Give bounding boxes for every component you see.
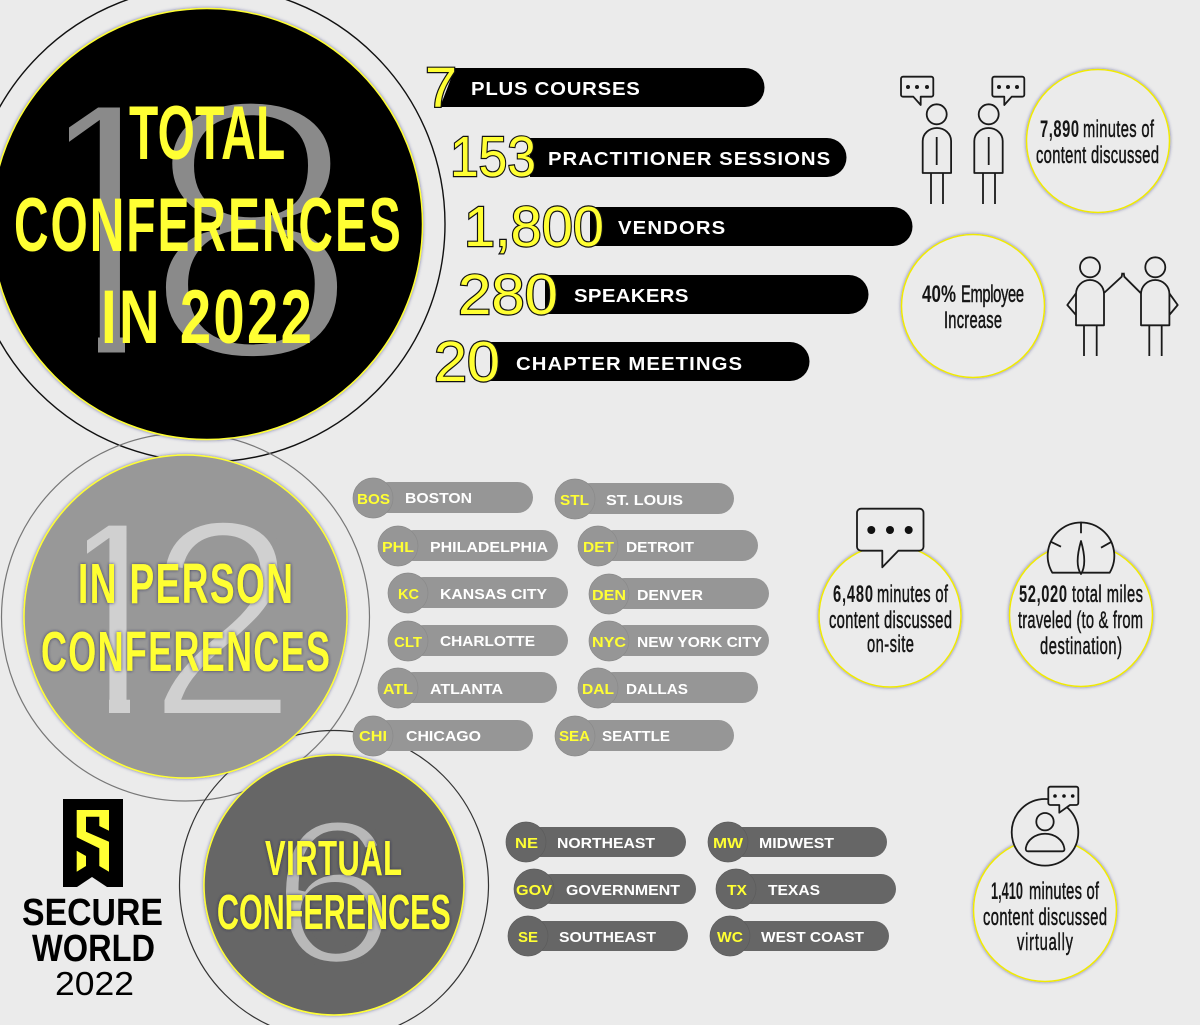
pill: Charlotte: CHARLOTTE [440, 633, 535, 650]
pill: St. Louis: ST. LOUIS [606, 492, 683, 509]
pill: Seattle [555, 716, 734, 756]
icon: online user with speech bubble [1012, 787, 1078, 866]
stat circle: 1,410 minutes virtual: 1,410 [991, 878, 1023, 905]
numeral 12: 1 [34, 461, 192, 778]
icon: two people talking [901, 77, 1024, 204]
pill: Chicago: CHI [359, 728, 387, 745]
ring: in person conferences [2, 433, 370, 801]
pill: West Coast: WC [717, 929, 743, 946]
pill: Boston: BOS [357, 491, 390, 508]
pill: Northeast [506, 822, 686, 862]
panel: total conferences [0, 8, 422, 440]
pill: Midwest: MW [713, 835, 744, 852]
pill: West Coast [710, 916, 889, 956]
pill: Southeast: SE [518, 929, 538, 946]
logo: SecureWorld 2022 [22, 799, 163, 1002]
pill: Philadelphia [378, 526, 558, 566]
icon: banner S [63, 799, 123, 887]
pill: Detroit: DET [583, 539, 614, 556]
stat bar: 7 plus courses: PLUS COURSES [471, 79, 640, 100]
ring: virtual conferences [180, 730, 488, 1025]
stat circle: 40% employee increase: 40% [922, 281, 956, 308]
pill: Midwest [708, 822, 887, 862]
stat bar: 153 practitioner sessions [450, 125, 846, 189]
pill: Philadelphia: PHILADELPHIA [430, 539, 548, 556]
stat bar: 1,800 vendors: VENDORS [618, 218, 725, 239]
icon: speedometer [1048, 522, 1114, 574]
numeral 6: 6 [271, 777, 396, 1007]
stat circle: 52,020 miles: total miles [1072, 581, 1143, 608]
icon: two people high five [1067, 257, 1178, 356]
panel: in person conferences [24, 455, 347, 778]
region pills: virtual [506, 822, 896, 956]
stat bar: 1,800 vendors: 1,800 [464, 195, 604, 259]
stat circle: 52,020 miles: destination) [1040, 633, 1122, 660]
stat circle: 1,410 minutes virtual [974, 838, 1116, 982]
heading: total conferences in 2022: TOTAL [129, 92, 285, 176]
pill: Kansas City [388, 573, 568, 613]
stat bar: 1,800 vendors [464, 195, 912, 259]
pill: Kansas City: KANSAS CITY [440, 586, 547, 603]
pill: Charlotte [388, 621, 568, 661]
pill: Philadelphia: PHL [382, 539, 414, 556]
pill: Texas [716, 869, 896, 909]
stat circle: 6,480 minutes on-site [819, 545, 961, 687]
pill: New York City [589, 621, 769, 661]
heading: virtual conferences: CONFERENCES [217, 885, 451, 940]
pill: Dallas [578, 668, 758, 708]
pill: Northeast: NE [515, 835, 538, 852]
pill: Detroit: DETROIT [626, 539, 694, 556]
pill: Seattle: SEATTLE [602, 728, 670, 745]
heading: total conferences in 2022: CONFERENCES [14, 184, 401, 268]
pill: Government: GOV [516, 882, 552, 899]
pill: Atlanta: ATL [383, 681, 413, 698]
heading: in person conferences [41, 552, 330, 684]
stat circle: 7,890 minutes: minutes of [1083, 116, 1154, 143]
numeral 18 [69, 104, 338, 356]
pill: Texas: TX [727, 882, 747, 899]
stat circle: 7,890 minutes: content discussed [1036, 142, 1159, 169]
pill: Boston [353, 478, 533, 518]
pill: Government: GOVERNMENT [566, 882, 680, 899]
logo: SecureWorld 2022: 2022 [55, 965, 134, 1002]
pill: Southeast [508, 916, 688, 956]
stat bar: 153 practitioner sessions: 153 [450, 125, 536, 189]
pill: St. Louis [555, 479, 734, 519]
stat circle: 6,480 minutes on-site: on-site [867, 631, 914, 658]
pill: Dallas: DALLAS [626, 681, 688, 698]
stat circle: 1,410 minutes virtual: minutes of [1029, 878, 1099, 905]
pill: West Coast: WEST COAST [761, 929, 864, 946]
pill: Denver [589, 574, 769, 614]
stat bar: 20 chapter meetings: CHAPTER MEETINGS [516, 354, 742, 375]
pill: New York City: NEW YORK CITY [637, 634, 762, 651]
numeral 12: 2 [147, 461, 298, 778]
pill: Texas: TEXAS [768, 882, 820, 899]
pill: Kansas City: KC [398, 586, 419, 603]
heading: virtual conferences: VIRTUAL [265, 831, 402, 886]
ring: total conferences [0, 0, 445, 462]
stat circle: 6,480 minutes on-site: content discussed [829, 607, 952, 634]
stat circle: 52,020 miles: traveled (to & from [1018, 607, 1143, 634]
heading: total conferences in 2022 [14, 92, 401, 360]
pill: Atlanta: ATLANTA [430, 681, 503, 698]
stat circle: 6,480 minutes on-site: 6,480 [833, 581, 873, 608]
stat circle: 40% employee increase: Employee [961, 281, 1024, 308]
pill: Detroit [578, 526, 758, 566]
stat bar: 20 chapter meetings: 20 [434, 330, 500, 394]
pill: New York City: NYC [592, 634, 626, 651]
pill: Midwest: MIDWEST [759, 835, 834, 852]
numeral 18: 8 [142, 21, 361, 439]
stat circle: 52,020 miles: 52,020 [1019, 581, 1067, 608]
heading: in person conferences: IN PERSON [78, 552, 293, 616]
pill: St. Louis: STL [560, 492, 589, 509]
heading: in person conferences: CONFERENCES [41, 621, 330, 684]
stat circle: 1,410 minutes virtual: content discussed [983, 904, 1107, 931]
stat bar: 7 plus courses: 7 [425, 56, 457, 120]
stat bar: 153 practitioner sessions: PRACTITIONER SESSIONS [548, 149, 830, 170]
heading: virtual conferences [217, 831, 451, 940]
logo: SecureWorld 2022: SECURE [22, 892, 163, 934]
stat bar: 7 plus courses [425, 56, 764, 120]
pill: Dallas: DAL [582, 681, 614, 698]
stat circle: 6,480 minutes on-site: minutes of [877, 581, 948, 608]
stat circle: 1,410 minutes virtual: virtually [1017, 929, 1074, 956]
pill: Southeast: SOUTHEAST [559, 929, 656, 946]
stat bar: 280 speakers: 280 [458, 263, 558, 327]
stat bar: 280 speakers [458, 263, 869, 327]
pill: Chicago [353, 716, 533, 756]
pill: Charlotte: CLT [394, 634, 422, 651]
pill: Chicago: CHICAGO [406, 728, 481, 745]
stat bar: 20 chapter meetings [434, 330, 810, 394]
pill: Denver: DEN [592, 587, 626, 604]
stat bar: 280 speakers: SPEAKERS [574, 286, 688, 307]
city pills: in person [353, 478, 769, 756]
pill: Boston: BOSTON [405, 490, 472, 507]
logo: SecureWorld 2022: WORLD [32, 928, 155, 970]
pill: Government [514, 869, 696, 909]
icon: speech bubble [857, 509, 924, 567]
pill: Atlanta [378, 668, 557, 708]
stat circle: 7,890 minutes: 7,890 [1040, 116, 1079, 143]
pill: Denver: DENVER [637, 587, 703, 604]
stat circle: 7,890 minutes [1026, 70, 1170, 212]
stat circle: 40% employee increase [902, 234, 1044, 378]
pill: Seattle: SEA [559, 728, 590, 745]
numeral 18: 1 [0, 21, 208, 439]
heading: total conferences in 2022: IN 2022 [101, 275, 312, 360]
numeral 12 [87, 522, 280, 713]
pill: Northeast: NORTHEAST [557, 835, 655, 852]
stat circle: 40% employee increase: Increase [944, 307, 1002, 334]
stat circle: 52,020 miles [1010, 544, 1152, 686]
panel: virtual conferences [204, 755, 464, 1015]
